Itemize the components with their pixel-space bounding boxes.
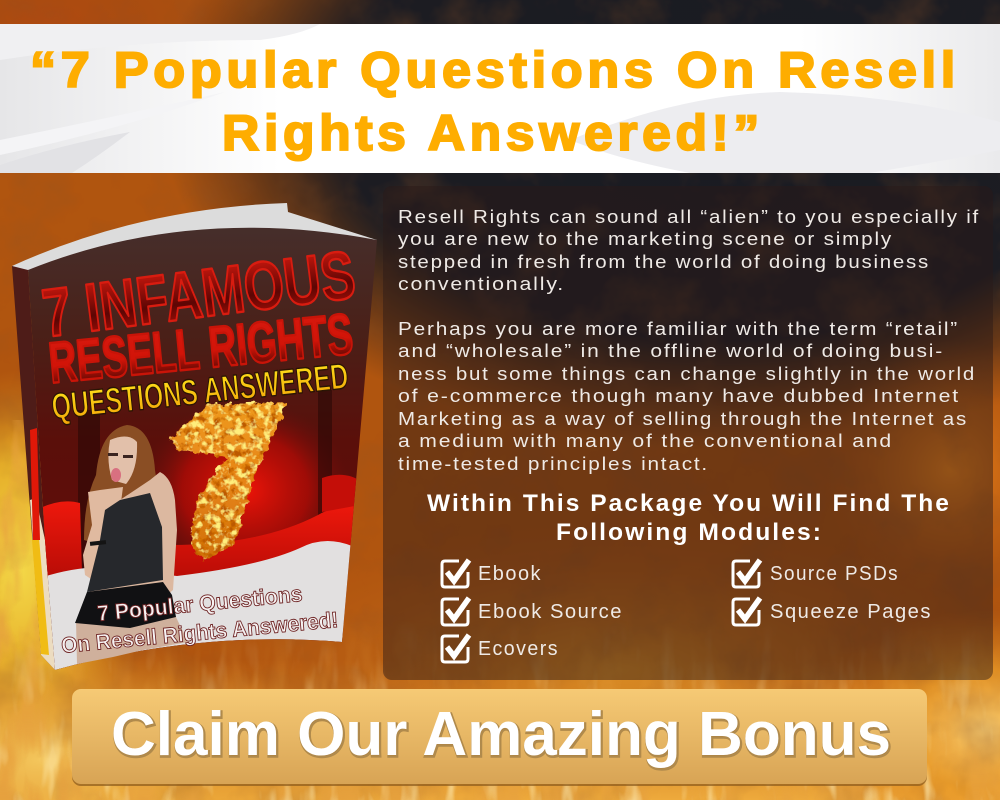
intro text: of e-commerce though many have dubbed Internet xyxy=(398,385,960,406)
book spine xyxy=(12,266,55,670)
cover title xyxy=(38,237,359,427)
book cover xyxy=(28,228,377,670)
item: Ebook Source xyxy=(442,598,623,625)
intro text: Perhaps you are more familiar with the term “retail” xyxy=(398,318,959,339)
tank top xyxy=(87,493,163,592)
intro text: Resell Rights can sound all “alien” to you especially if xyxy=(398,206,980,227)
banner swooshes xyxy=(0,24,1000,173)
cover subtitle: 7 Popular Questions xyxy=(96,581,304,626)
call to action button: Claim Our Amazing Bonus xyxy=(111,700,891,769)
header banner xyxy=(0,24,1000,173)
ribbon xyxy=(40,501,82,578)
intro text: you are new to the marketing scene or simply xyxy=(398,228,893,249)
item: Ebook: Ebook xyxy=(478,563,542,585)
intro text: a medium with many of the conventional and xyxy=(398,430,893,451)
item: Ecovers xyxy=(442,635,559,662)
shorts xyxy=(75,582,176,628)
raised arm xyxy=(83,487,123,583)
item: Squeeze Pages xyxy=(733,598,932,625)
modules heading xyxy=(427,490,951,546)
item: Source PSDs xyxy=(733,560,899,587)
white footer xyxy=(40,541,352,670)
intro text: stepped in fresh from the world of doing business xyxy=(398,251,930,272)
intro text xyxy=(398,206,980,474)
cover title: QUESTIONS ANSWERED xyxy=(50,355,350,427)
modules heading: Within This Package You Will Find The xyxy=(427,490,951,517)
intro text: conventionally. xyxy=(398,273,565,294)
cover subtitle: On Resell Rights Answered! xyxy=(60,607,339,658)
cover title: 7 INFAMOUS xyxy=(38,237,359,352)
hair xyxy=(84,425,160,545)
item: Ecovers: Ecovers xyxy=(478,638,559,660)
call to action button: Claim Our Amazing Bonus xyxy=(112,702,892,770)
eyes and tongue xyxy=(108,453,133,482)
face xyxy=(108,436,137,484)
item: Squeeze Pages: Squeeze Pages xyxy=(770,601,932,623)
intro text: Marketing as a way of selling through the Internet as xyxy=(398,408,968,429)
item: Source PSDs: Source PSDs xyxy=(770,563,899,585)
intro text: time-tested principles intact. xyxy=(398,453,709,474)
title: Rights Answered!” xyxy=(222,105,764,161)
item: Ebook Source: Ebook Source xyxy=(478,601,623,623)
cover subtitle xyxy=(60,581,339,658)
intro text: and “wholesale” in the offline world of doing busi- xyxy=(398,340,944,361)
woman xyxy=(75,425,188,664)
call to action button xyxy=(72,689,927,786)
item: Ebook xyxy=(442,560,542,587)
ebook mockup xyxy=(12,200,390,680)
flaming seven xyxy=(170,402,287,560)
cover title: RESELL RIGHTS xyxy=(46,301,356,396)
modules heading: Following Modules: xyxy=(556,519,823,546)
legs xyxy=(76,615,188,664)
torso and arms xyxy=(90,472,177,598)
title xyxy=(30,42,960,161)
book pages xyxy=(12,203,377,272)
intro text: ness but some things can change slightly in the world xyxy=(398,363,976,384)
title: “7 Popular Questions On Resell xyxy=(30,42,960,98)
checklist xyxy=(442,560,932,662)
panel: description xyxy=(383,186,993,680)
wristband xyxy=(90,540,106,546)
